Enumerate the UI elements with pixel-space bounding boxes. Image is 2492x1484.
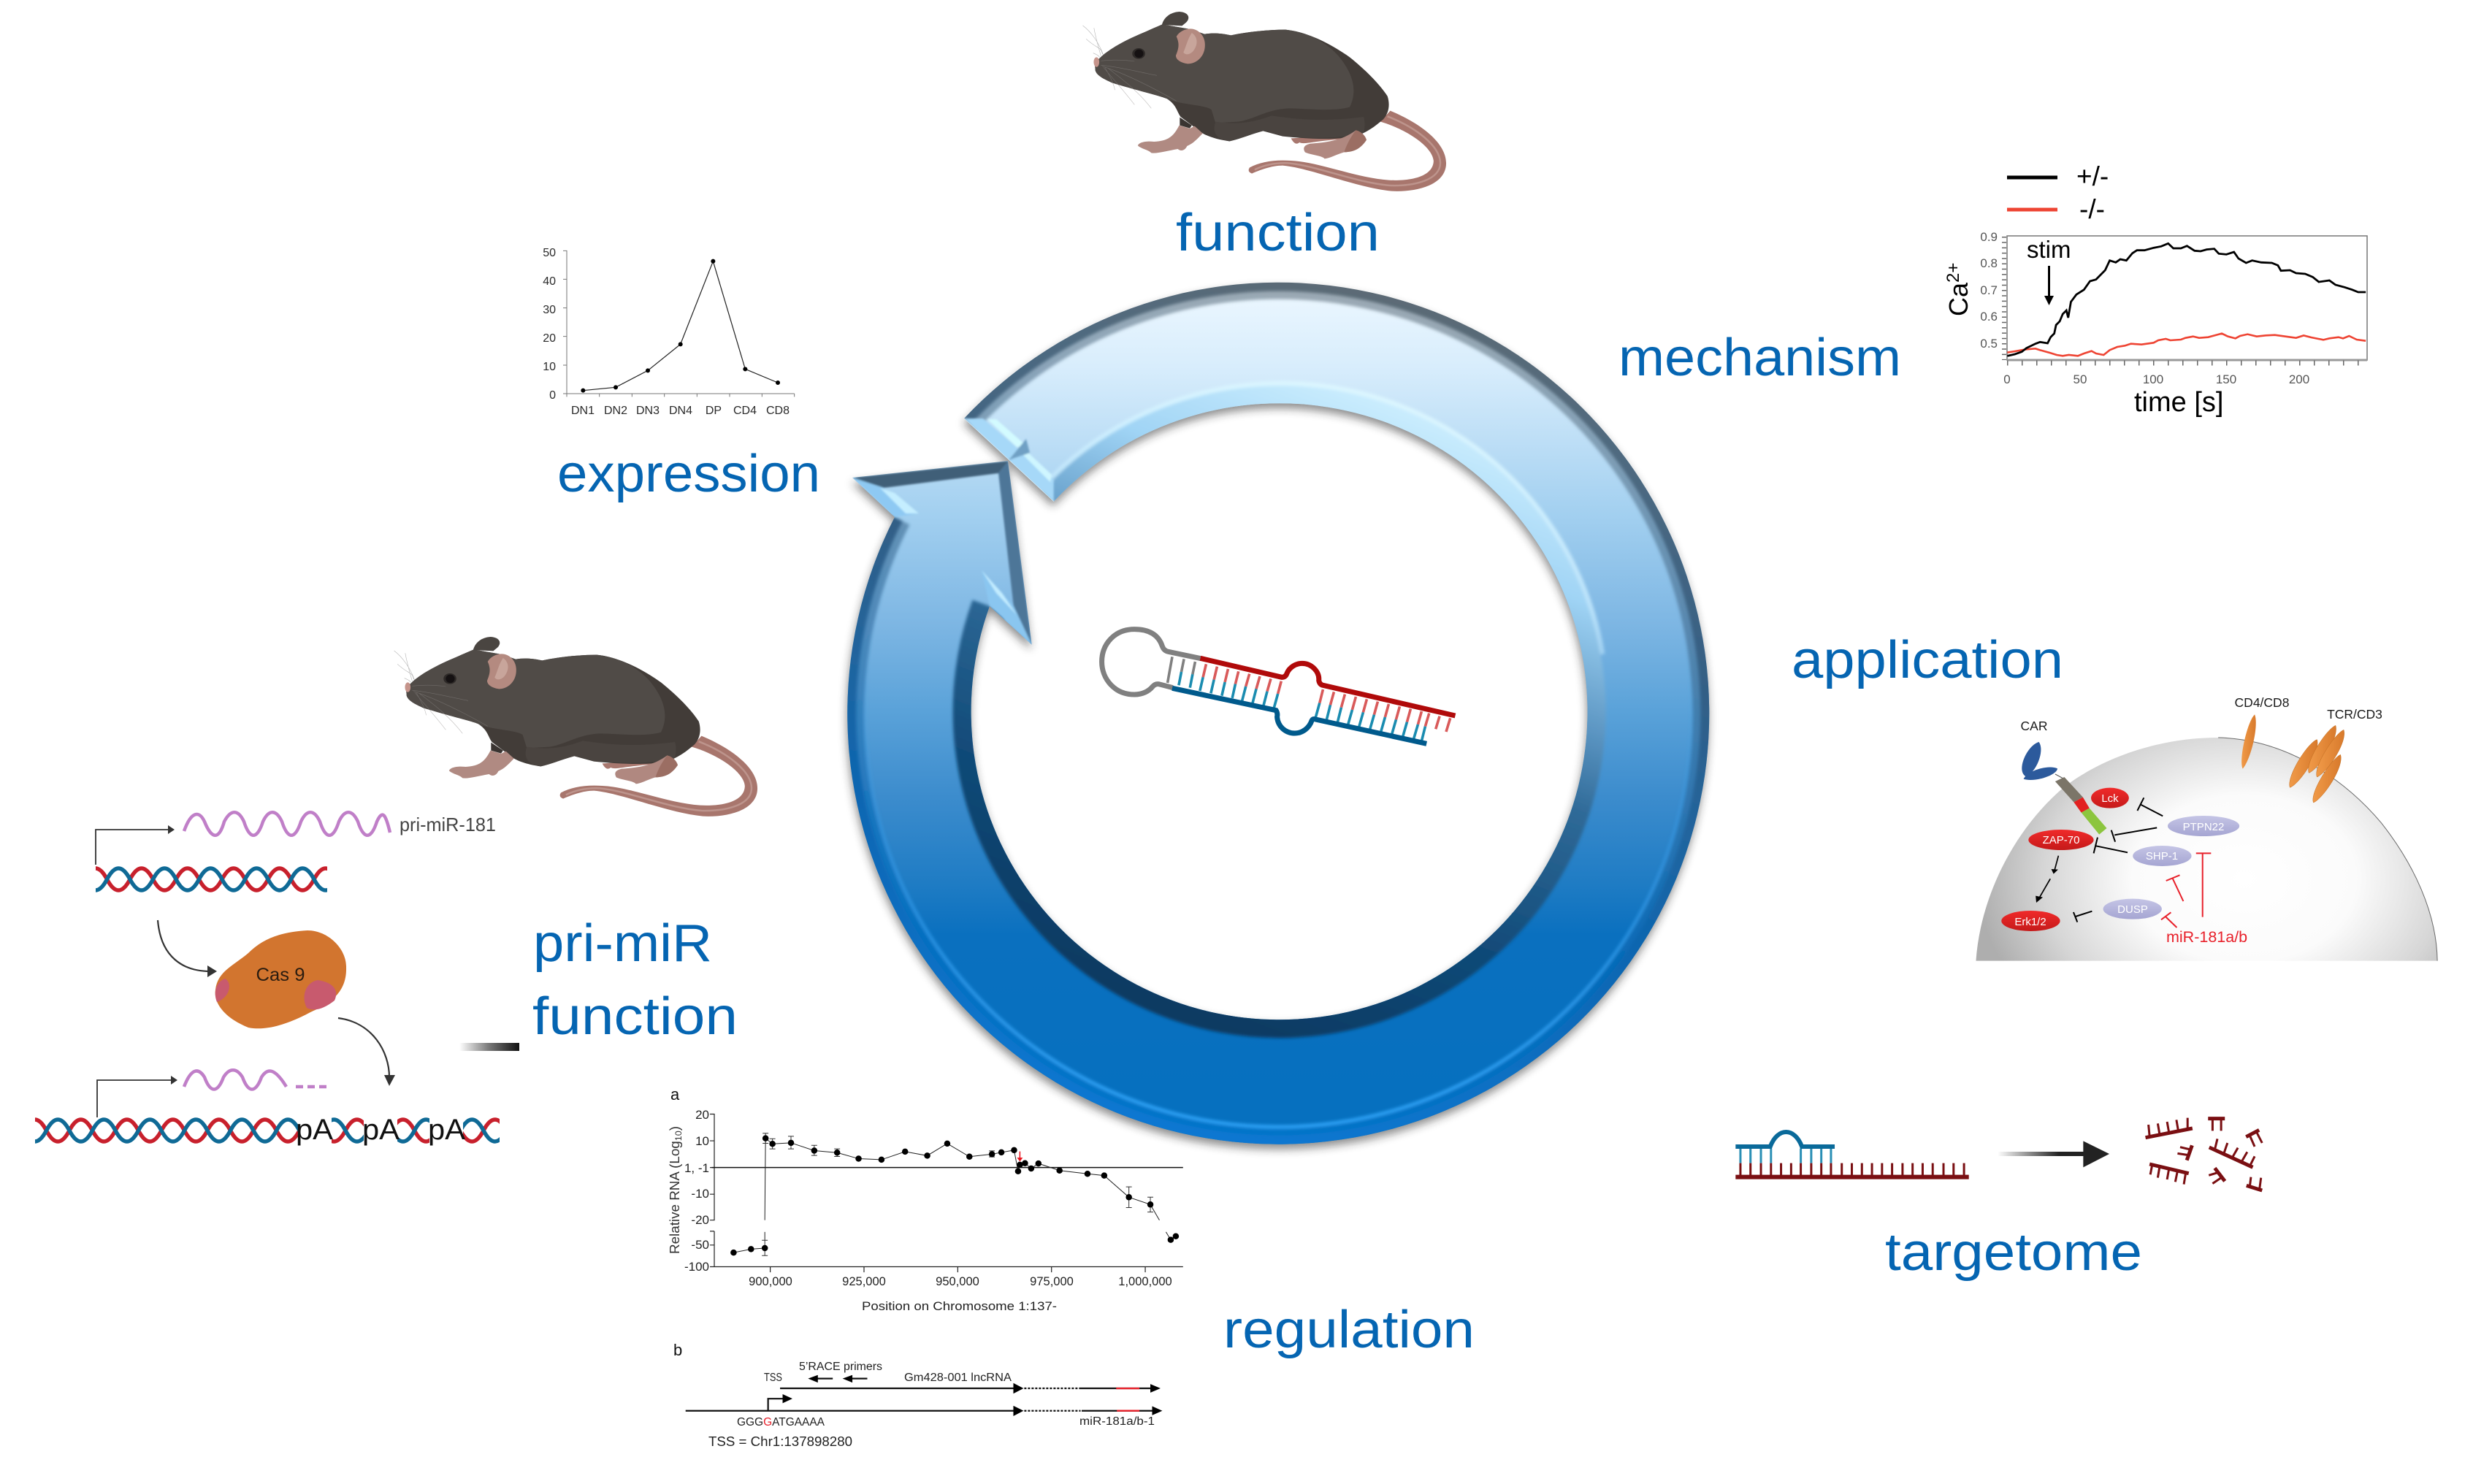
Cas9 protein: Cas 9 <box>256 965 305 985</box>
chart a: relative RNA: -100 <box>684 1260 709 1274</box>
label: targetome: targetome <box>1885 1223 2142 1282</box>
diagram b: TSS map: Gm428-001 lncRNA <box>904 1372 1012 1384</box>
icon: mouse top <box>1083 12 1446 191</box>
promoter arrow top <box>96 825 175 865</box>
proteins <box>2001 788 2239 931</box>
diagram: T cell signalling: CAR <box>2021 719 2047 733</box>
legend: +/- <box>2076 161 2109 191</box>
line chart: expression: DN3 <box>636 405 660 417</box>
diagram: T cell signalling: Lck <box>2101 792 2119 805</box>
chart a: relative RNA: 1, -1 <box>684 1161 709 1175</box>
truncated wave <box>184 1070 327 1090</box>
chart a: relative RNA: 925,000 <box>842 1275 886 1288</box>
line chart: expression: 30 <box>543 304 556 316</box>
line chart: calcium: time [s] <box>2134 387 2223 418</box>
line chart: expression <box>543 247 795 417</box>
diagram: T cell signalling: TCR/CD3 <box>2327 707 2382 722</box>
chart a: relative RNA: 20 <box>695 1108 709 1122</box>
label: pri-miR function <box>532 914 738 1046</box>
diagram: T cell signalling: PTPN22 <box>2183 821 2224 833</box>
legend <box>2007 161 2109 224</box>
line chart: calcium <box>1943 161 2367 418</box>
chart a: relative RNA: a <box>670 1085 680 1104</box>
diagram: T cell signalling <box>1976 695 2437 961</box>
line chart: expression: CD4 <box>733 405 757 417</box>
diagram: Cas9 deletion of pri-miR: pri-miR-181 <box>400 814 496 835</box>
Cas9 protein <box>215 930 346 1028</box>
line chart: expression: 10 <box>543 361 556 373</box>
diagram: T cell signalling: CD4/CD8 <box>2235 695 2289 710</box>
arrow from Cas9 <box>338 1018 395 1086</box>
diagram: T cell signalling: SHP-1 <box>2146 850 2178 863</box>
line chart: expression: 40 <box>543 275 556 288</box>
diagram b: TSS map: GGGGATGAAAA <box>737 1416 825 1428</box>
line chart: expression: 50 <box>543 247 556 259</box>
diagram: T cell signalling: ZAP-70 <box>2043 834 2079 846</box>
label: application: application <box>1792 631 2063 689</box>
stim annotation <box>2027 236 2071 305</box>
chart a: relative RNA: 900,000 <box>749 1275 792 1288</box>
ring arrow <box>846 283 1709 1150</box>
line chart: expression: 0 <box>549 389 556 402</box>
diagram b: TSS map <box>673 1341 1162 1449</box>
CD4/CD8 <box>2241 714 2256 769</box>
diagram b: TSS map: b <box>673 1341 682 1359</box>
diagram: T cell signalling: Erk1/2 <box>2014 916 2046 928</box>
chart a: relative RNA: ) <box>668 1126 682 1131</box>
chart a: relative RNA: -20 <box>691 1213 709 1227</box>
chart a: relative RNA: 10 <box>673 1131 684 1141</box>
chart a: relative RNA: 1,000,000 <box>1118 1275 1172 1288</box>
label: expression: expression <box>557 445 820 503</box>
DNA bottom with pA <box>35 1117 500 1145</box>
line chart: calcium: 100 <box>2143 372 2163 386</box>
line chart: expression: DN1 <box>571 405 595 417</box>
label: mechanism: mechanism <box>1618 329 1901 387</box>
line chart: expression: CD8 <box>766 405 790 417</box>
chart a: relative RNA: Position on Chromosome 1:137- <box>862 1299 1057 1313</box>
inhibition lines <box>2038 798 2163 922</box>
DNA bottom with pA: pA <box>296 1114 333 1146</box>
chart a: relative RNA: 950,000 <box>936 1275 979 1288</box>
line chart: calcium: 0.6 <box>1980 310 1998 324</box>
line chart: calcium: 0.7 <box>1980 283 1998 297</box>
line chart: calcium: Ca <box>1943 283 1973 316</box>
TCR/CD3 <box>2290 725 2344 803</box>
chart a: relative RNA: 10 <box>695 1134 709 1148</box>
legend: -/- <box>2079 194 2105 224</box>
line chart: expression: 20 <box>543 332 556 345</box>
label: pri-miR function: pri-miR <box>533 914 712 973</box>
diagram b: TSS map: 5’RACE primers <box>799 1361 882 1373</box>
degradation arrow <box>1998 1141 2109 1167</box>
line chart: calcium: 2+ <box>1943 263 1963 283</box>
arrow to Cas9 <box>158 920 217 977</box>
line chart: calcium: 0.8 <box>1980 256 1998 270</box>
label: pri-miR function: function <box>532 987 738 1046</box>
stim annotation: stim <box>2027 236 2071 263</box>
mRNA fragments <box>2146 1118 2262 1190</box>
DNA top <box>84 868 360 890</box>
chart a: relative RNA: 975,000 <box>1030 1275 1074 1288</box>
diagram: Cas9 deletion of pri-miR <box>23 812 530 1147</box>
diagram: T cell signalling: DUSP <box>2117 903 2148 916</box>
diagram b: TSS map: miR-181a/b-1 <box>1079 1415 1155 1428</box>
line chart: calcium: 0.5 <box>1980 337 1998 351</box>
CAR <box>2022 742 2106 835</box>
line chart: expression: DP <box>706 405 722 417</box>
gradient arrow stub <box>459 1043 519 1051</box>
arrow head facets <box>852 418 1054 645</box>
miRNA-target duplex <box>1735 1132 1969 1177</box>
chart a: relative RNA: -10 <box>691 1187 709 1201</box>
pri-miR wave <box>184 812 390 835</box>
DNA bottom with pA: pA <box>428 1114 465 1146</box>
line chart: calcium: 200 <box>2289 372 2309 386</box>
diagram: target mRNA degradation <box>1735 1118 2262 1190</box>
line chart: expression: DN4 <box>669 405 692 417</box>
diagram: T cell signalling: miR-181a/b <box>2166 928 2247 946</box>
promoter arrow bottom <box>97 1076 177 1117</box>
DNA bottom with pA: pA <box>362 1114 400 1146</box>
chart a: relative RNA <box>668 1085 1183 1313</box>
central miRNA hairpin <box>1102 630 1455 743</box>
line chart: calcium: 0 <box>2003 372 2011 386</box>
line chart: expression: DN2 <box>604 405 627 417</box>
diagram b: TSS map: TSS <box>764 1372 782 1384</box>
line chart: calcium: 50 <box>2074 372 2087 386</box>
line chart: calcium: 150 <box>2216 372 2236 386</box>
chart a: relative RNA: Relative RNA (Log <box>668 1146 682 1254</box>
label: regulation: regulation <box>1223 1301 1475 1359</box>
label: function: function <box>1176 204 1380 262</box>
chart a: relative RNA: -50 <box>691 1238 709 1252</box>
icon: mouse left <box>394 637 757 816</box>
diagram b: TSS map: TSS = Chr1:137898280 <box>708 1434 852 1449</box>
line chart: calcium: 0.9 <box>1980 230 1998 244</box>
cell <box>1976 738 2437 961</box>
